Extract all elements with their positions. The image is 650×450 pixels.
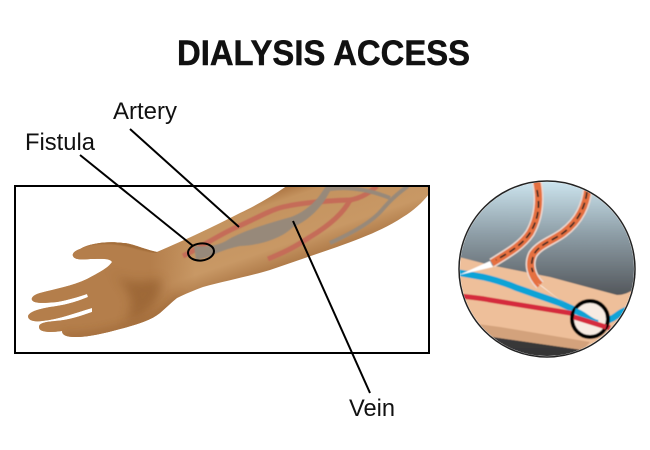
- title: DIALYSIS ACCESS: [177, 34, 470, 73]
- inset background: [460, 182, 634, 356]
- palm shading: [122, 278, 163, 319]
- blue vein: [455, 272, 640, 321]
- inset border: [459, 181, 635, 357]
- inset: cannulated fistula: [455, 178, 640, 362]
- leader line: fistula: [80, 155, 193, 246]
- artery: lower branch: [268, 200, 350, 259]
- lower skin shadow: [480, 324, 590, 350]
- vein: fistula segment: [194, 186, 333, 260]
- skin band: [455, 256, 640, 350]
- catheter right: [531, 188, 588, 285]
- label: vein: Vein: [349, 395, 395, 422]
- hand edge shading: [62, 298, 180, 337]
- red artery: [458, 296, 610, 328]
- vein: side branches: [330, 186, 408, 243]
- needles: [459, 261, 565, 304]
- leader line: vein: [293, 221, 370, 393]
- thumb shading: [78, 242, 157, 252]
- illustration: forearm and hand: [28, 187, 428, 337]
- forearm and hand shape: [28, 187, 428, 337]
- label: fistula: Fistula: [25, 129, 96, 156]
- leader line: artery: [130, 129, 239, 227]
- catheter left: [492, 178, 538, 263]
- magnified vessels: [575, 311, 598, 323]
- fistula circle: [187, 242, 215, 262]
- magnifier: [572, 301, 608, 337]
- label: artery: Artery: [113, 98, 177, 125]
- frame: [15, 186, 429, 353]
- artery: upper branch: [183, 186, 377, 256]
